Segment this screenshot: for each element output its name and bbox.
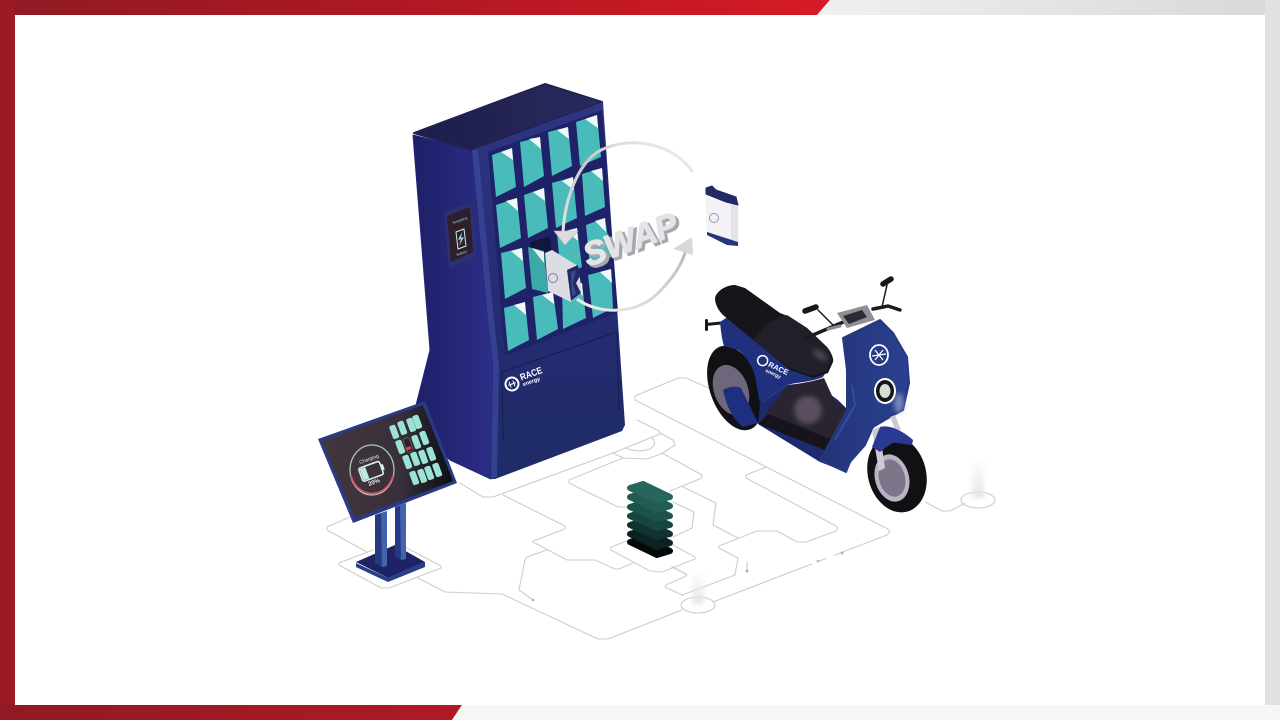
swap cycle arrows <box>554 143 693 310</box>
floorboard <box>758 414 838 452</box>
RACE energy logo on locker <box>503 365 546 394</box>
kickstand peg <box>705 319 726 331</box>
bottom arc <box>577 250 686 310</box>
left mirror and stem <box>805 307 833 325</box>
battery bay backing <box>488 110 618 356</box>
battery slots <box>492 115 613 351</box>
battery top cap <box>706 186 738 205</box>
front fork <box>872 415 901 471</box>
battery logo <box>710 214 718 222</box>
side status screen <box>444 202 476 269</box>
locker edge highlight <box>472 150 499 479</box>
SWAP label: SWAP <box>581 207 686 275</box>
rear fender panel <box>723 387 758 427</box>
charging gauge: 20% <box>368 478 382 488</box>
open teal door <box>528 247 548 293</box>
small line dots <box>532 552 844 601</box>
battery base strip <box>707 232 738 246</box>
kiosk display <box>318 401 457 582</box>
top arc <box>563 143 693 232</box>
slot corner highlights <box>501 115 612 315</box>
kiosk base <box>356 545 425 582</box>
dashboard cluster <box>837 305 875 328</box>
slot corner flap <box>532 248 544 263</box>
locker top <box>414 84 602 150</box>
SWAP label: SWAP <box>578 205 684 273</box>
body RACE logo <box>753 354 790 383</box>
white battery body <box>545 250 582 302</box>
top arrowhead <box>554 231 578 245</box>
side status screen: Battery <box>456 249 468 257</box>
floor node glow: bottom <box>692 568 704 604</box>
battery shaded edge <box>731 202 738 244</box>
battery status grid <box>389 414 443 486</box>
body RACE logo: RACE <box>767 360 790 377</box>
rear wheel <box>696 338 774 438</box>
charging gauge: Charging <box>359 453 380 466</box>
swap station locker <box>411 84 625 479</box>
RACE energy logo on locker: RACE <box>519 365 544 383</box>
floor node glow: right <box>972 455 984 498</box>
seat front cushion <box>753 315 832 376</box>
kiosk frame <box>318 401 457 523</box>
battery handle <box>567 265 581 301</box>
headlight <box>874 378 896 404</box>
erased dash gaps on the outer line <box>812 555 834 563</box>
low battery indicator <box>406 446 412 451</box>
battery stack <box>630 484 670 555</box>
compartment highlight <box>794 396 822 424</box>
under-seat compartment <box>764 378 848 450</box>
side status screen: Swapping <box>452 216 468 225</box>
bottom arrowhead <box>673 237 693 255</box>
shield highlight <box>894 393 904 413</box>
dark empty slot <box>530 236 553 262</box>
page frame: right band <box>1265 0 1280 720</box>
kiosk screen <box>322 405 453 518</box>
floating charged battery <box>706 186 738 246</box>
charging gauge <box>350 445 394 495</box>
battery white body <box>706 193 738 244</box>
front wheel <box>859 429 935 519</box>
seat <box>715 285 833 378</box>
body RACE logo: energy <box>764 368 782 381</box>
circuit lines on the floor <box>327 378 995 639</box>
battery being swapped <box>528 236 582 302</box>
page frame: top band <box>0 0 1280 15</box>
rear body under seat <box>720 312 833 404</box>
kiosk legs <box>375 503 406 567</box>
handle shadow <box>571 270 576 296</box>
battery logo <box>548 274 558 282</box>
handlebars <box>806 306 900 338</box>
right mirror and stem <box>882 279 891 307</box>
page frame: left band <box>0 0 15 720</box>
shield logo <box>870 345 888 365</box>
electric scooter <box>696 279 935 519</box>
seat highlight <box>811 347 829 363</box>
lower body sweep <box>758 382 877 472</box>
front fender <box>872 426 913 452</box>
front shield <box>820 320 909 472</box>
RACE energy logo on locker: energy <box>522 376 542 388</box>
locker left side <box>411 135 493 479</box>
lower door panel outline <box>502 332 619 440</box>
shield crease <box>835 385 855 440</box>
page frame: bottom band <box>0 705 1280 720</box>
locker front <box>472 102 625 479</box>
